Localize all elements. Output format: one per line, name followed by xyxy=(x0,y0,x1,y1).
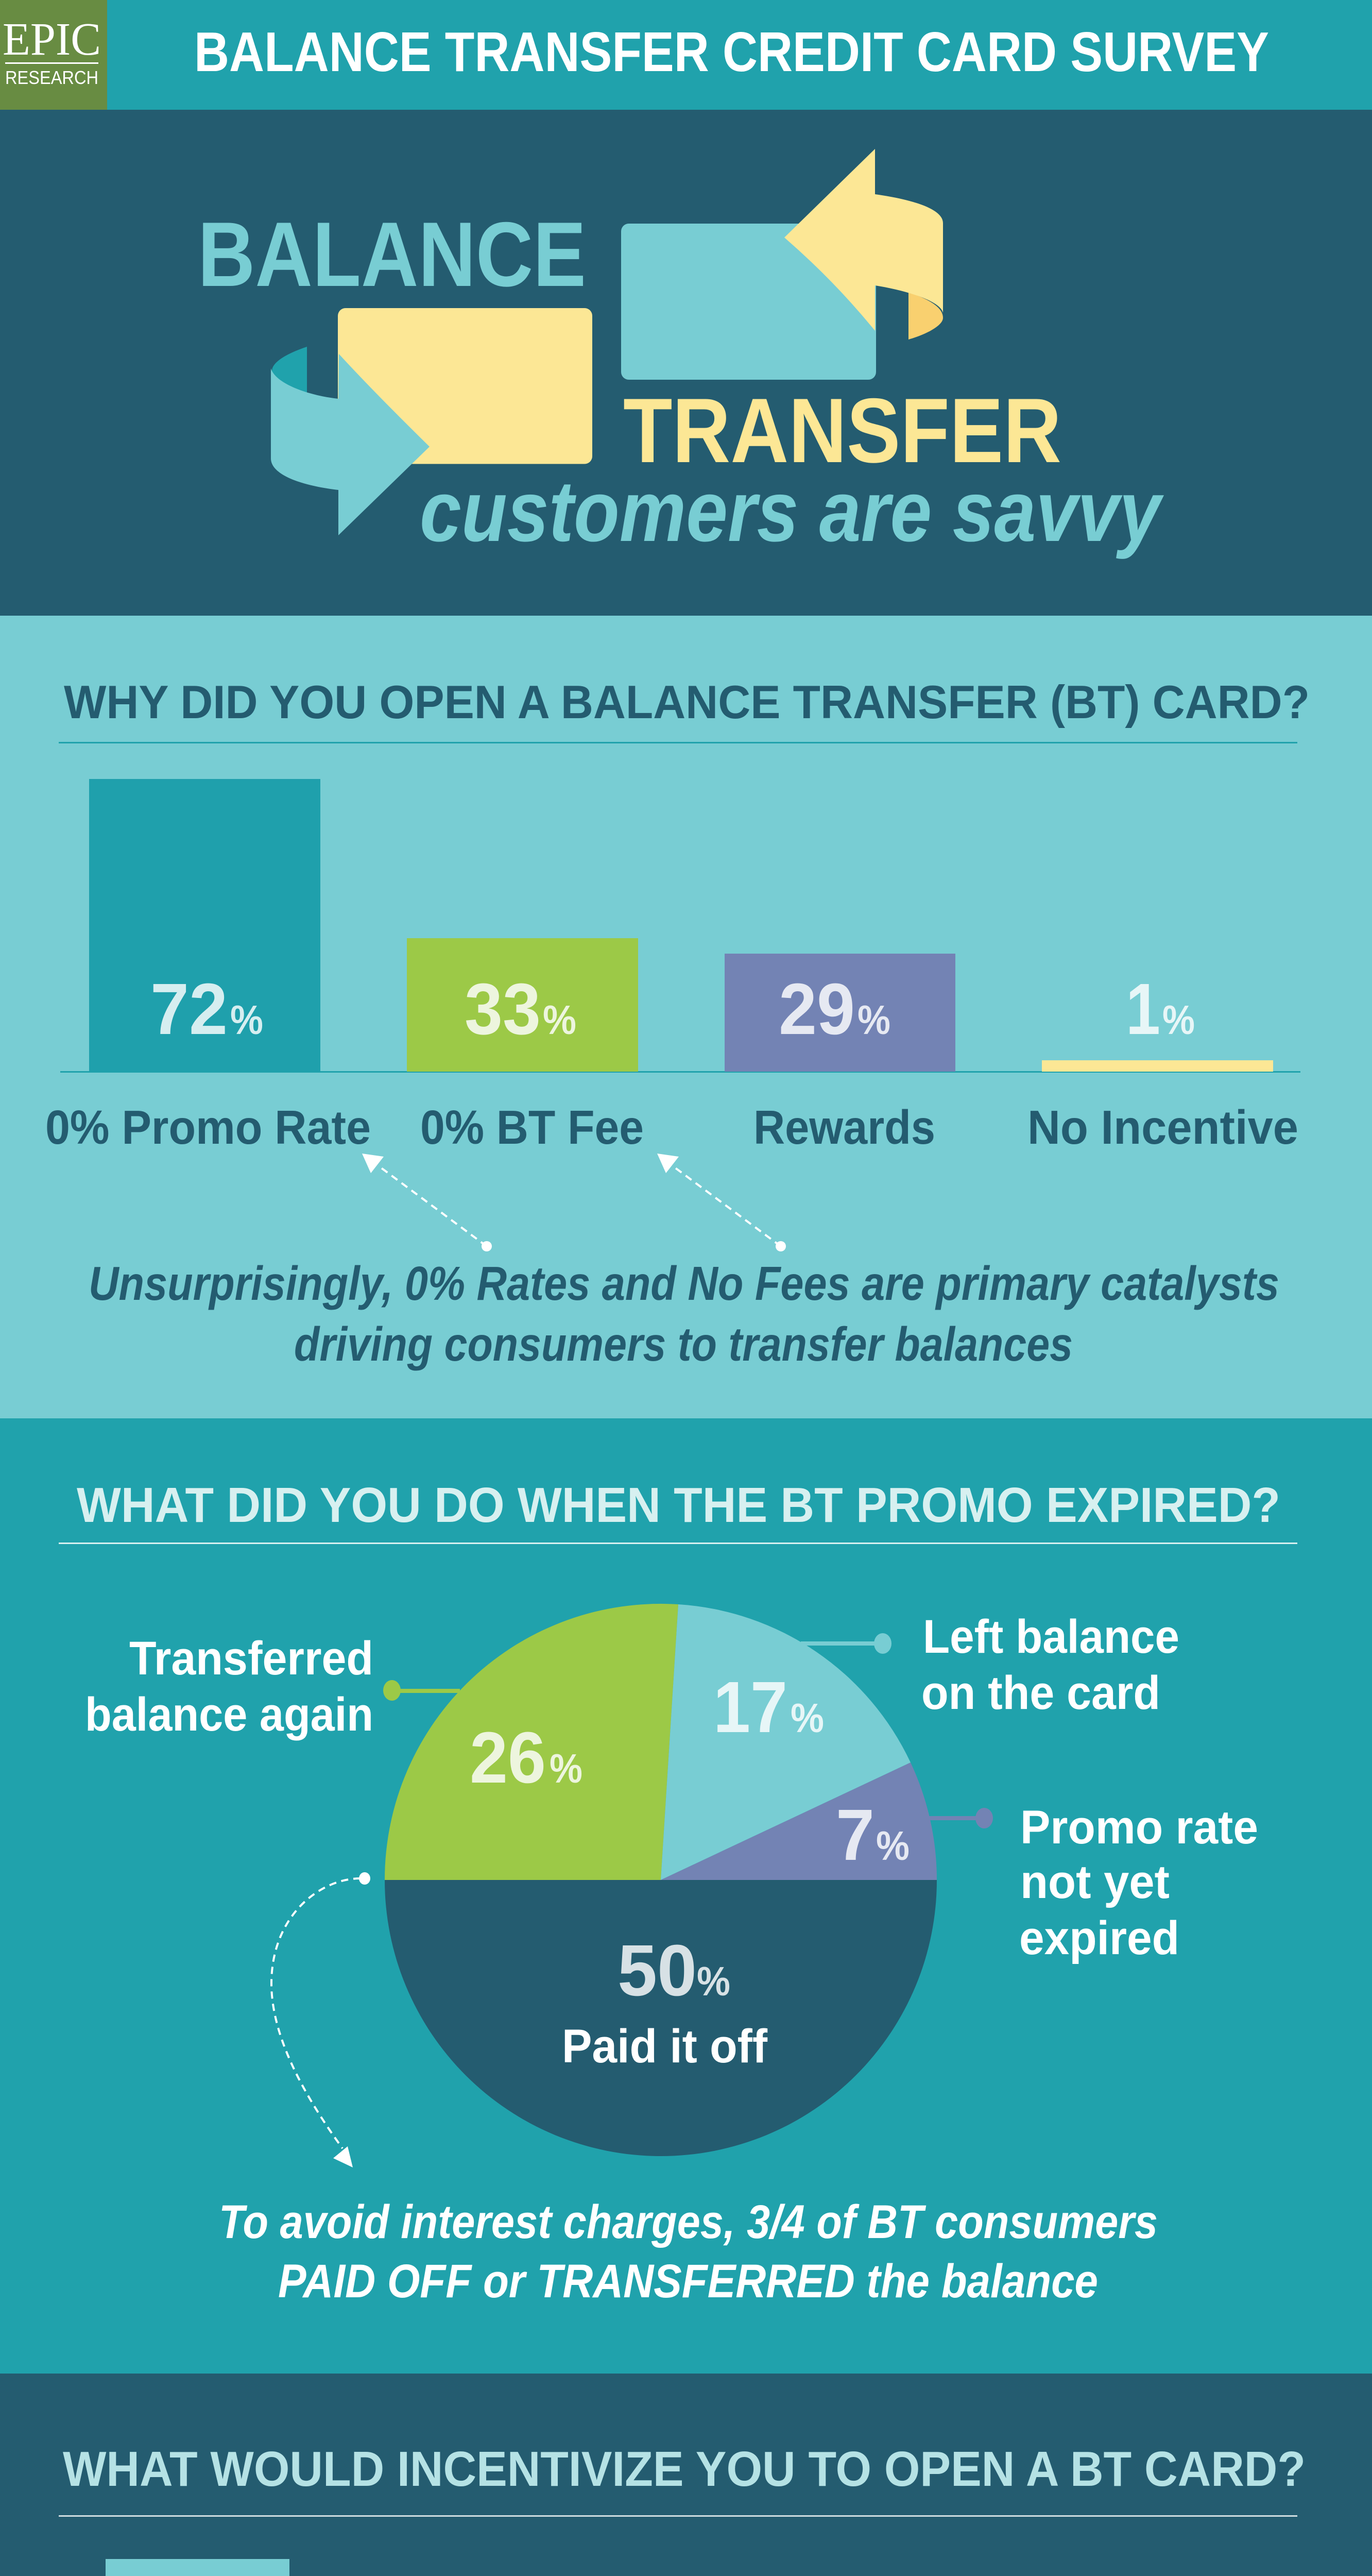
bar: 0% BT fee 33% xyxy=(407,938,638,1072)
panel: BT promo expired xyxy=(0,1418,1372,2374)
callout: promo rate not yet expired: not yet xyxy=(1020,1856,1170,1908)
slice value: 50% paid it off: 50 xyxy=(618,1929,697,2011)
slice value: 7%: 7 xyxy=(836,1794,874,1875)
heading: transfer: TRANSFER xyxy=(623,379,1061,482)
panel: what would incentivize xyxy=(0,2374,1372,2576)
heading: WHAT WOULD INCENTIVIZE YOU TO OPEN A BT CARD? xyxy=(63,2442,1306,2497)
takeaway text xyxy=(89,1257,1279,1371)
slice value: 7%: % xyxy=(876,1823,910,1869)
logo: Epic Research xyxy=(0,0,107,110)
takeaway text: driving consumers to transfer balances xyxy=(294,1317,1073,1371)
takeaway text: PAID OFF or TRANSFERRED the balance xyxy=(278,2255,1098,2308)
logo: Epic Research: EPIC xyxy=(3,14,101,65)
bar: 0% promo rate 72% xyxy=(89,779,320,1072)
callout: transferred balance again xyxy=(85,1632,460,1741)
callout: left balance on the card: on the card xyxy=(921,1667,1160,1719)
heading: balance: BALANCE xyxy=(198,203,586,306)
slice value: 50% paid it off xyxy=(562,1929,767,2073)
axis labels: No Incentive xyxy=(1027,1100,1298,1154)
bar chart: reasons xyxy=(45,779,1300,1154)
callout: promo rate not yet expired: expired xyxy=(1019,1912,1179,1964)
axis labels: 0% BT Fee xyxy=(420,1100,644,1154)
bar: 0% promo rate 72%: % xyxy=(230,997,263,1043)
icon: transfer cards xyxy=(271,149,943,535)
tagline: customers are savvy xyxy=(420,463,1164,560)
bar: rewards 29%: % xyxy=(858,997,890,1043)
bar: rewards 29% xyxy=(725,954,955,1072)
arrow: to BT fee xyxy=(657,1154,786,1251)
bar chart: incentives xyxy=(60,2559,1300,2576)
slice value: 7% xyxy=(836,1794,910,1875)
callout: promo rate not yet expired xyxy=(929,1801,1258,1964)
axis labels xyxy=(45,1100,1298,1154)
axis labels: Rewards xyxy=(753,1100,935,1154)
arrow: to promo rate xyxy=(362,1154,492,1251)
callout: transferred balance again: Transferred xyxy=(129,1632,373,1685)
takeaway text: To avoid interest charges, 3/4 of BT consumers xyxy=(219,2196,1158,2248)
bar: no incentive 1%: 1 xyxy=(1126,968,1160,1049)
arrow: pie to takeaway xyxy=(271,1872,370,2167)
heading: WHAT DID YOU DO WHEN THE BT PROMO EXPIRED? xyxy=(77,1478,1280,1533)
takeaway text xyxy=(219,2196,1158,2308)
slice value: 26%: % xyxy=(550,1745,582,1791)
axis labels: 0% Promo Rate xyxy=(45,1100,371,1154)
logo: Epic Research: RESEARCH xyxy=(5,67,98,88)
bar: 0% BT fee 33%: 33 xyxy=(465,968,541,1049)
bar: 0% BT fee 33%: % xyxy=(543,997,576,1043)
callout: left balance on the card: Left balance xyxy=(923,1611,1179,1663)
callout: transferred balance again: balance again xyxy=(85,1688,373,1741)
heading: WHY DID YOU OPEN A BALANCE TRANSFER (BT) CARD? xyxy=(64,676,1310,728)
callout: left balance on the card xyxy=(801,1611,1179,1719)
bar: no incentive 1%: % xyxy=(1162,997,1195,1043)
panel: hero xyxy=(0,110,1372,616)
slice value: 17%: % xyxy=(791,1695,824,1741)
bar: 0% BT 18 MOS 66% xyxy=(106,2559,289,2576)
slice value: 26%: 26 xyxy=(470,1717,546,1798)
slice value: 17%: 17 xyxy=(713,1666,787,1748)
callout: promo rate not yet expired: Promo rate xyxy=(1020,1801,1258,1854)
panel: why open a BT card xyxy=(0,616,1372,1418)
panel: header xyxy=(0,0,1372,110)
slice value: 50% paid it off: Paid it off xyxy=(562,2020,767,2073)
pie chart xyxy=(385,1604,937,2156)
slice value: 50% paid it off: % xyxy=(697,1958,730,2004)
bar: 0% promo rate 72%: 72 xyxy=(150,968,228,1049)
bar: rewards 29%: 29 xyxy=(779,968,855,1049)
bar: no incentive 1% xyxy=(1042,968,1273,1072)
